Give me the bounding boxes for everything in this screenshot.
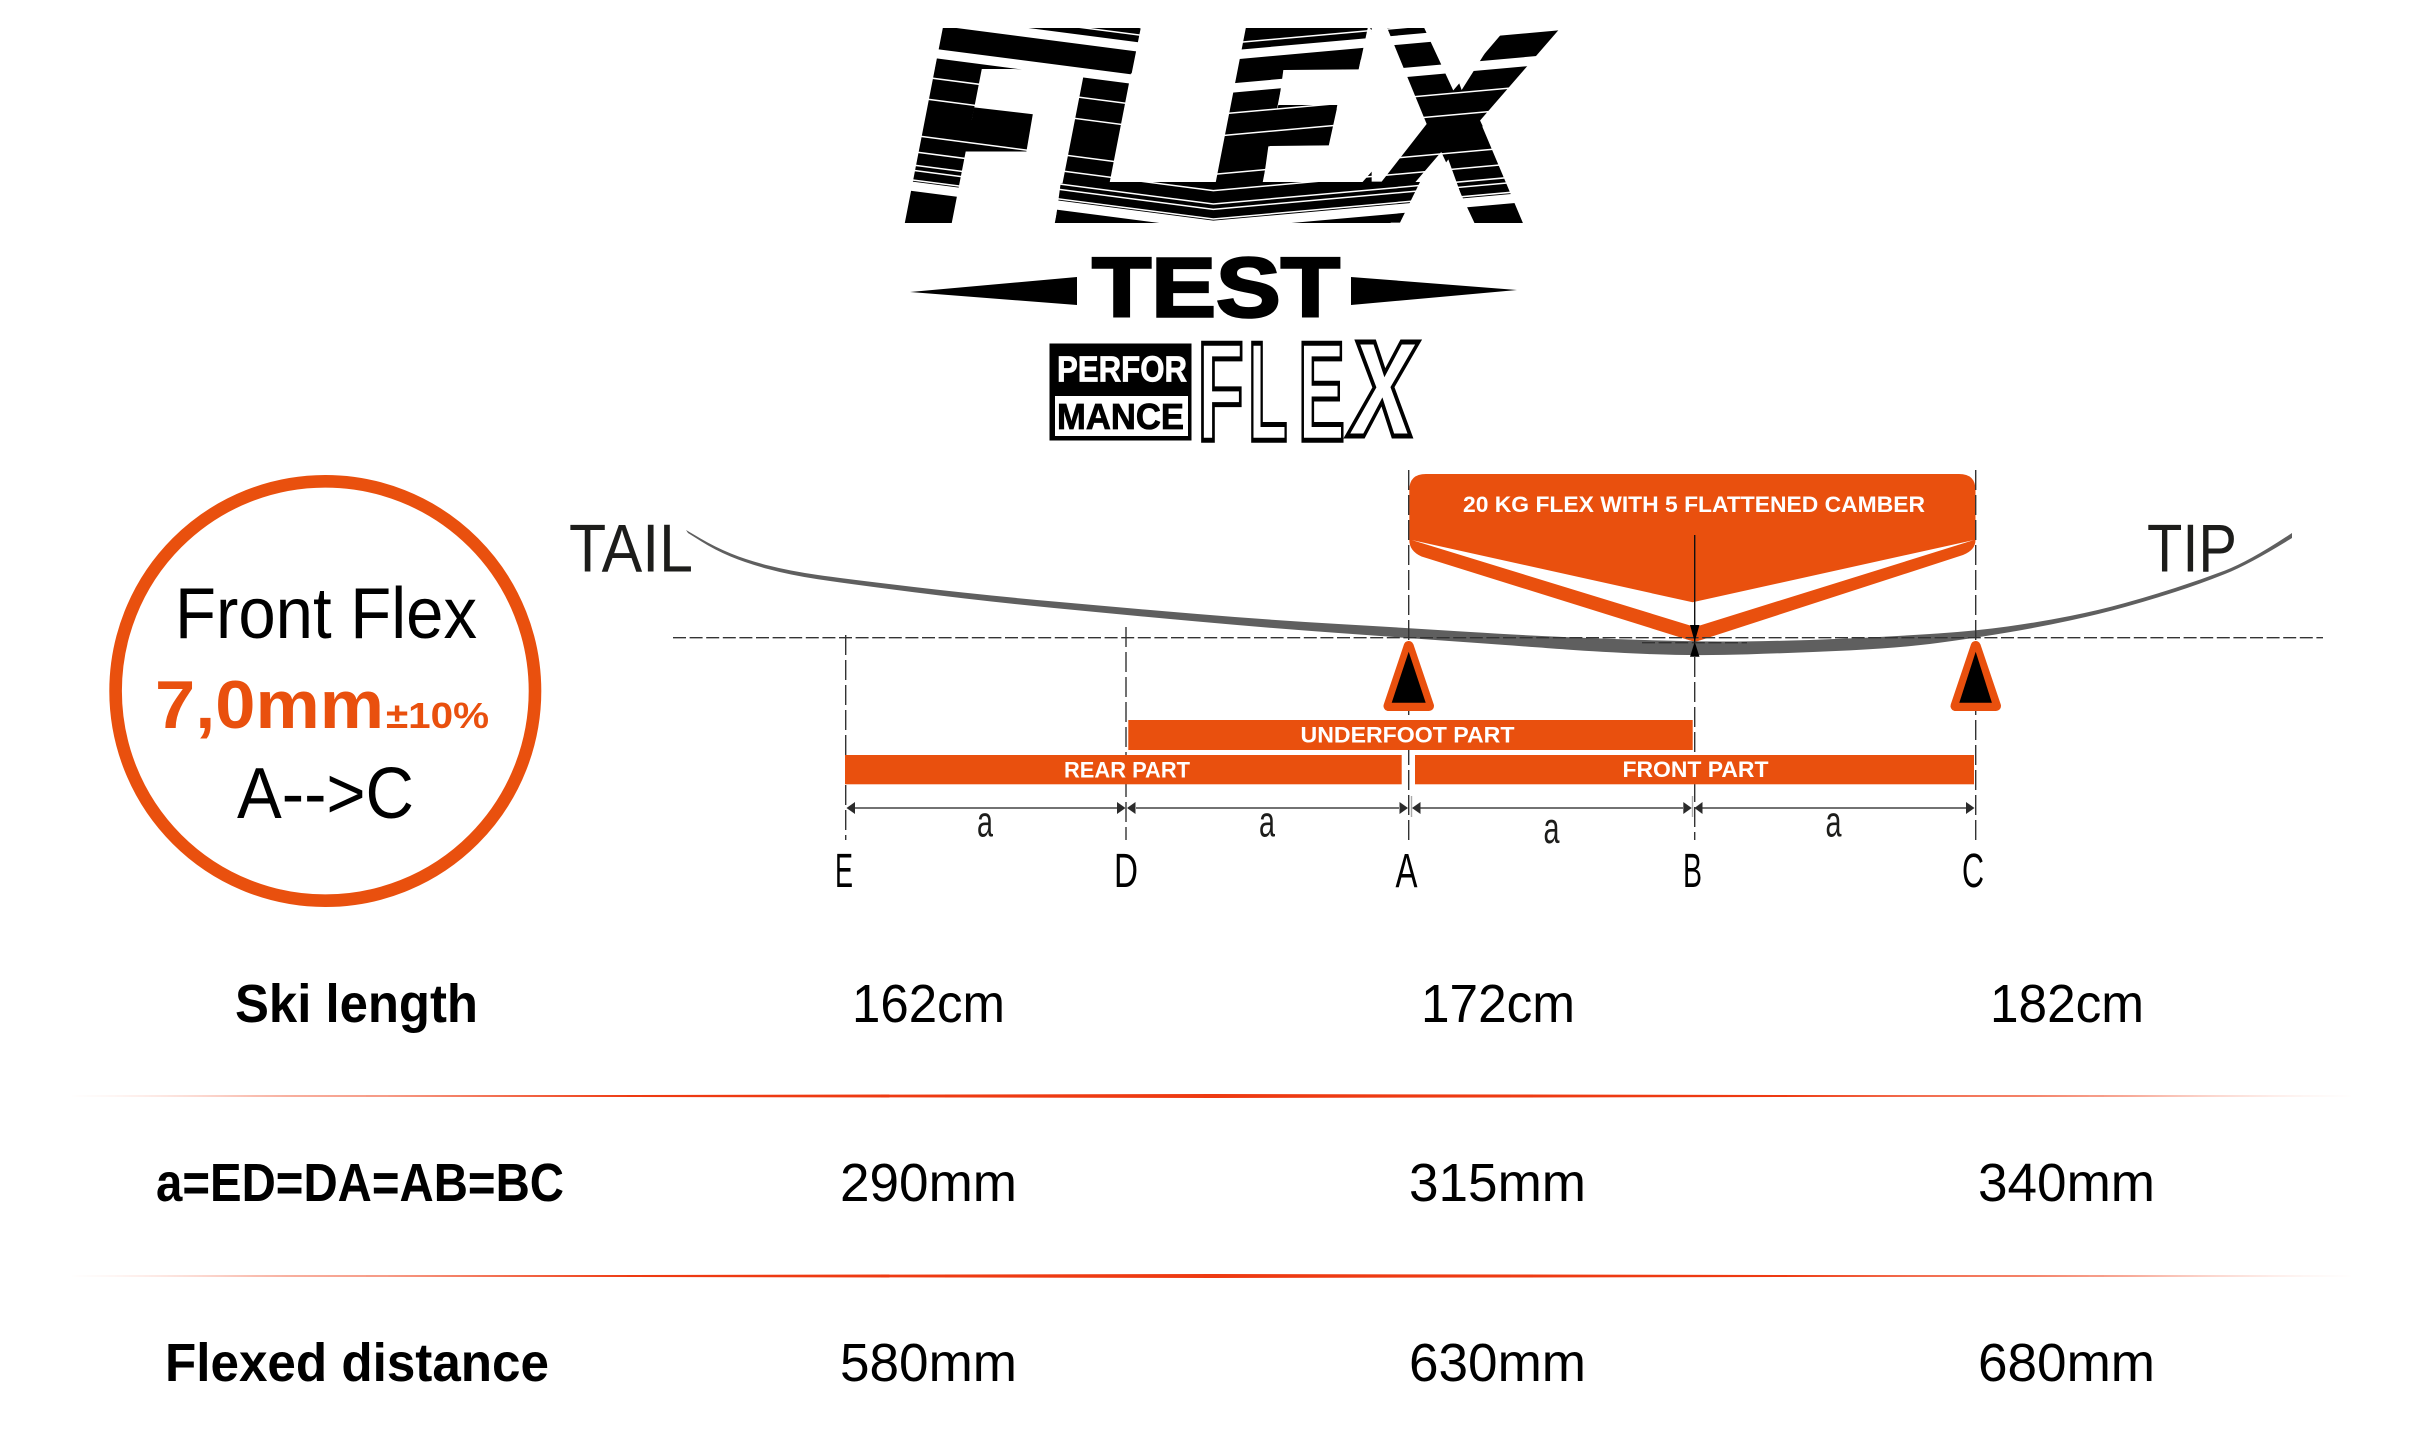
circle: front flex value: A-->C <box>237 754 414 834</box>
table row: flexed distance <box>165 1333 2155 1393</box>
table row: flexed distance: Flexed distance <box>165 1333 549 1393</box>
marker: deflection arrows at B <box>1690 625 1700 657</box>
reference baseline and measuring axes <box>673 470 2323 840</box>
bar: rear part <box>845 755 1402 784</box>
axis letters: E <box>835 845 853 898</box>
table row: segment length a: 290mm <box>840 1153 1017 1213</box>
table row: ski length: 162cm <box>852 974 1005 1034</box>
logo: Performance Flex: E <box>1298 312 1345 471</box>
logo: Performance Flex: F <box>1197 313 1244 471</box>
dimension labels: a: a <box>977 798 993 846</box>
label: tail: TAIL <box>569 510 693 586</box>
dimension labels: a: a <box>1826 798 1842 846</box>
table row: flexed distance: 680mm <box>1978 1333 2155 1393</box>
axis letters: D <box>1114 845 1138 898</box>
dimension labels: a <box>977 798 1842 853</box>
label: tip: TIP <box>2147 510 2237 586</box>
callout: 20 kg flex banner: 20 KG FLEX WITH 5 FLATTENED CAMBER <box>1463 492 1925 517</box>
logo: Performance Flex: L <box>1248 314 1288 471</box>
support triangle at C <box>1956 646 1996 706</box>
axis letters: B <box>1683 845 1702 898</box>
table row: ski length <box>235 974 2144 1034</box>
logo: TEST with side wedges <box>910 240 1517 334</box>
divider <box>65 1094 2359 1098</box>
dimension labels: a: a <box>1544 804 1560 853</box>
callout: 20 kg flex banner <box>1409 474 1976 642</box>
divider <box>65 1274 2359 1278</box>
bar: underfoot part <box>1128 720 1693 750</box>
circle: front flex value: Front Flex <box>175 574 477 654</box>
logo: Performance Flex: MANCE <box>1057 396 1184 437</box>
dimension labels: a: a <box>1259 798 1275 846</box>
table row: segment length a <box>156 1153 2155 1213</box>
circle: front flex value <box>116 481 535 901</box>
circle: front flex value: 7,0mm <box>155 667 384 743</box>
axis letters <box>835 845 1984 898</box>
table row: segment length a: 340mm <box>1978 1153 2155 1213</box>
logo: Performance Flex <box>1050 276 1427 475</box>
table row: segment length a: 315mm <box>1409 1153 1586 1213</box>
logo: Performance Flex: x <box>1342 276 1427 475</box>
table row: ski length: 182cm <box>1990 974 2144 1034</box>
bar: rear part: REAR PART <box>1064 757 1190 782</box>
table row: ski length: Ski length <box>235 974 478 1034</box>
table row: flexed distance: 580mm <box>840 1333 1017 1393</box>
circle: front flex value: ±10% <box>386 695 489 736</box>
dimension arrows <box>846 796 1974 817</box>
axis letters: C <box>1962 845 1984 898</box>
table row: flexed distance: 630mm <box>1409 1333 1586 1393</box>
ski profile <box>686 530 2292 655</box>
logo: Performance Flex: PERFOR <box>1057 348 1187 390</box>
table row: segment length a: a=ED=DA=AB=BC <box>156 1153 564 1213</box>
logo: FLEX striped wordmark <box>904 28 1558 223</box>
table row: ski length: 172cm <box>1421 974 1575 1034</box>
axis letters: A <box>1396 845 1418 898</box>
bar: front part: FRONT PART <box>1622 757 1769 782</box>
support triangle at A <box>1388 646 1429 706</box>
bar: front part <box>1415 755 1974 784</box>
bar: underfoot part: UNDERFOOT PART <box>1300 722 1515 747</box>
logo: TEST with side wedges: TEST <box>1092 240 1340 334</box>
